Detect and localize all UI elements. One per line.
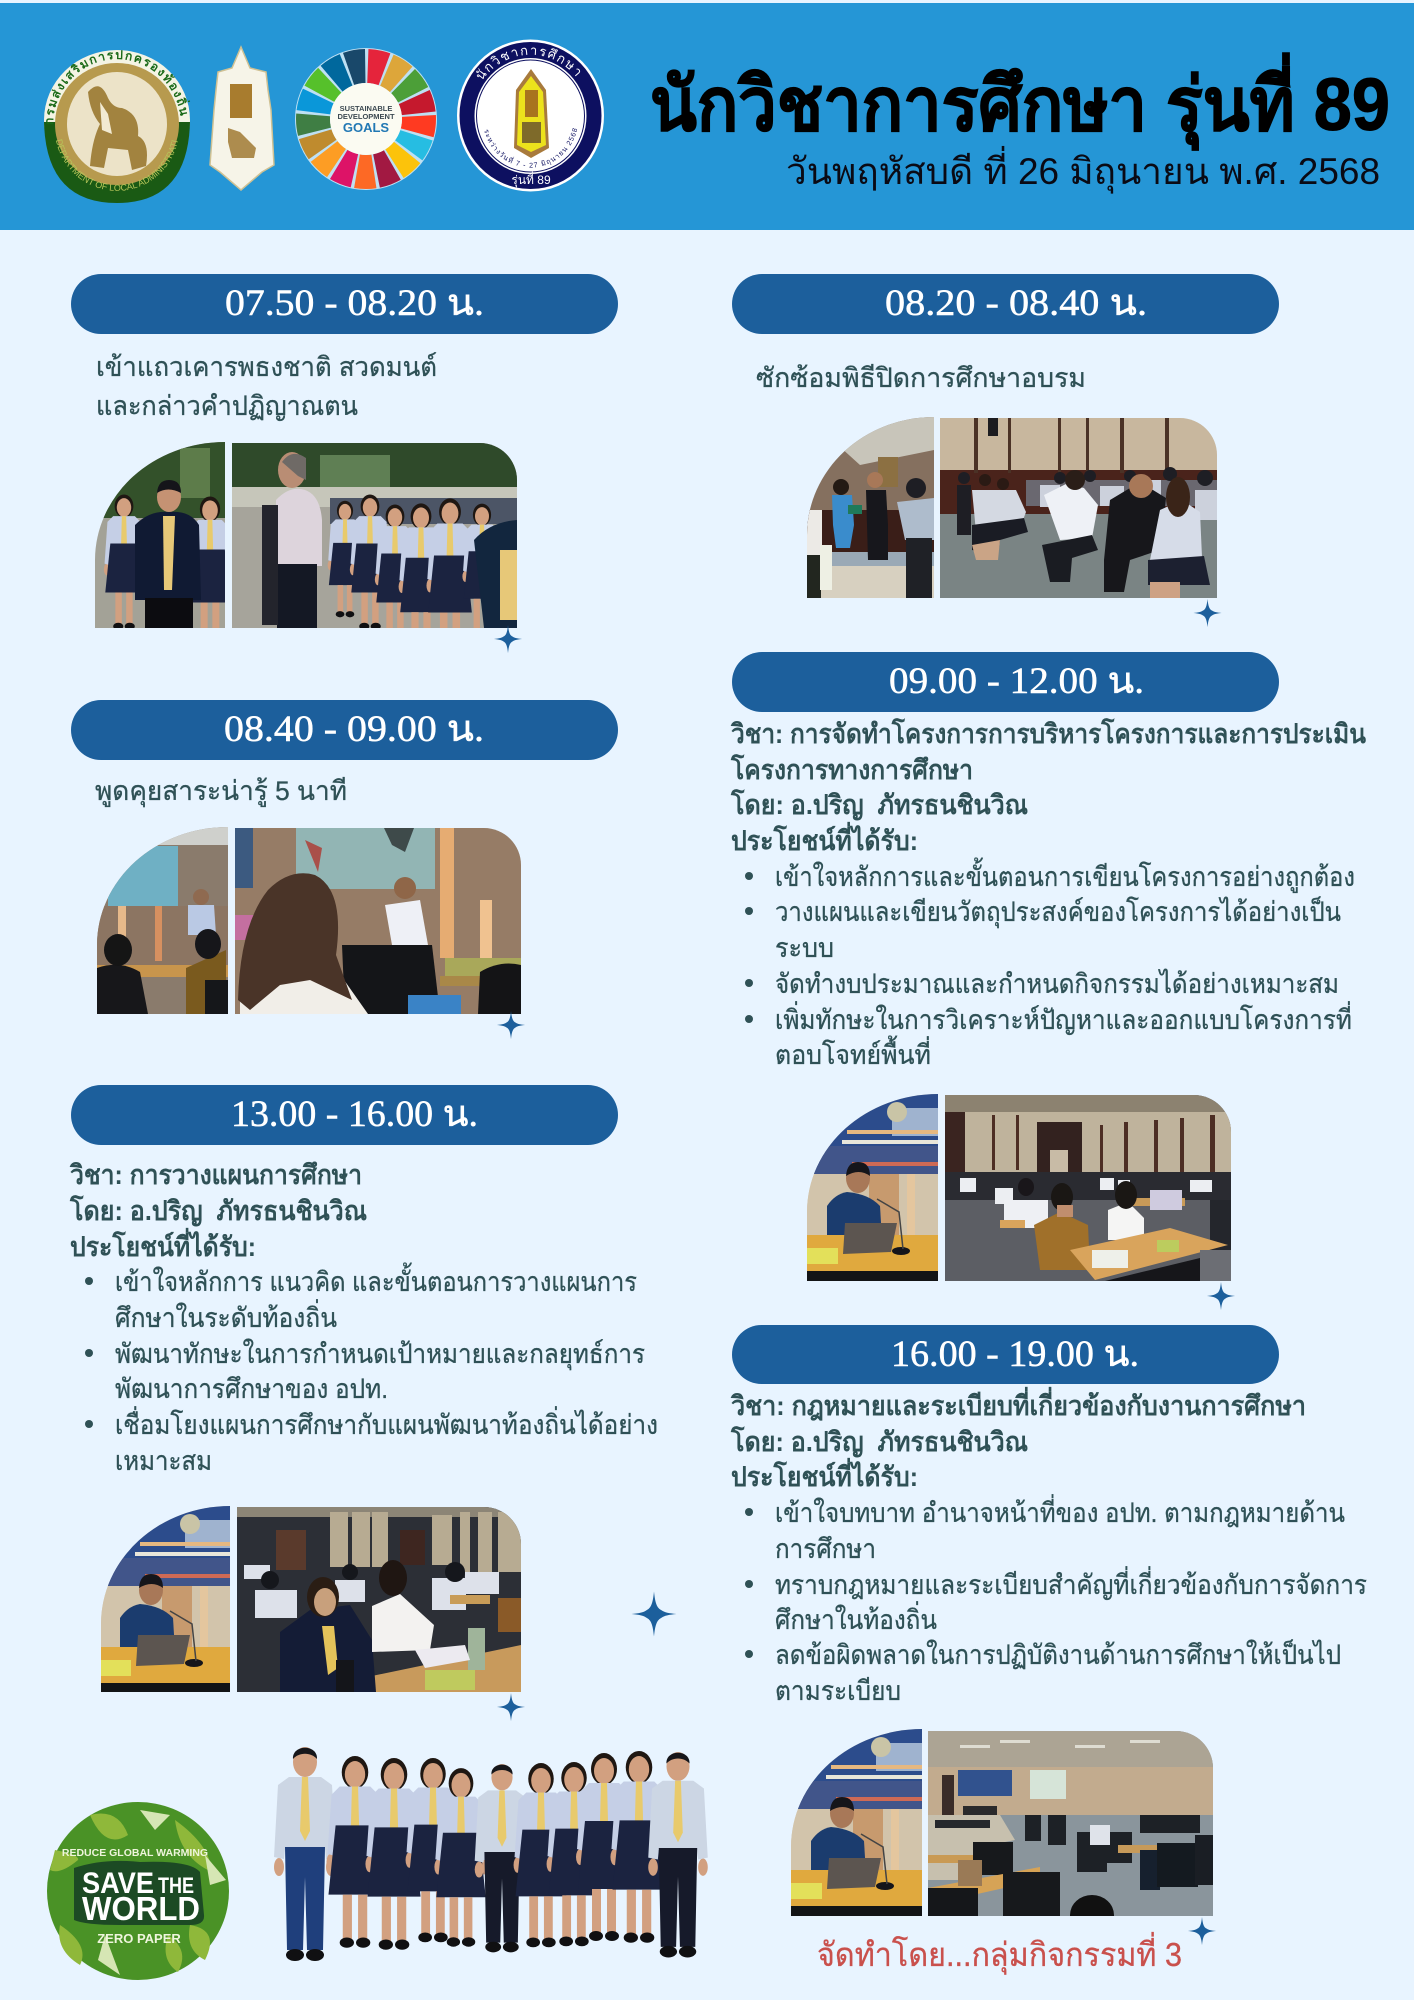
benefits list: ตอบโจทย์พื้นที่ [775,1035,931,1070]
logo: white shield emblem [210,47,274,190]
badge: save the world zero paper: SAVE [82,1867,154,1900]
photo: lecture and classroom [807,1094,1231,1281]
logo: sustainable development goals wheel: GOALS [343,120,389,135]
logo: cohort 89 badge: รุ่นที่ 89 [511,171,551,188]
large sparkle [632,1592,676,1636]
subtitle date: วันพฤหัสบดี ที่ 26 มิถุนายน พ.ศ. 2568 [786,145,1380,194]
logo: cohort 89 badge [457,40,604,192]
time pill: 08.40 - 09.00 น. [224,709,484,750]
badge: save the world zero paper: THE [158,1873,194,1898]
panel: 07.50-08.20 [71,274,618,656]
course details: วิชา: การจัดทำโครงการการบริหารโครงการและการประเมิน [730,717,1366,749]
course details: โครงการทางการศึกษา [730,753,973,785]
badge: save the world zero paper: ZERO PAPER [97,1931,181,1946]
sparkle [1188,1917,1216,1945]
sparkle [497,1011,525,1039]
badge: save the world zero paper [47,1802,229,1980]
benefits list: ระบบ [775,933,834,963]
panel: 08.20-08.40 [732,274,1279,627]
course details: โดย: อ.ปริญ ภัทรธนชินวิณ [69,1194,367,1227]
time pill: 09.00 - 12.00 น. [889,661,1144,702]
benefits list [745,1494,1367,1706]
benefits list [745,857,1355,1070]
course details: ประโยชน์ที่ได้รับ: [731,821,918,856]
benefits list: ศึกษาในระดับท้องถิ่น [115,1299,337,1333]
benefits list: เข้าใจหลักการ แนวคิด และขั้นตอนการวางแผนการ [115,1262,637,1297]
description: และกล่าวคำปฏิญาณตน [96,391,358,421]
logo: department of local administration [44,50,190,203]
sparkle [497,1693,525,1721]
logo: sustainable development goals wheel: DEVELOPMENT [337,112,395,121]
description [96,351,437,421]
course details [730,1386,1306,1492]
logo: sustainable development goals wheel: SUSTAINABLE [340,104,392,113]
course details [69,1160,367,1262]
time pill: 08.20 - 08.40 น. [885,283,1147,324]
benefits list: วางแผนและเขียนวัตถุประสงค์ของโครงการได้อย่างเป็น [775,894,1341,929]
course details: วิชา: การวางแผนการศึกษา [69,1160,362,1190]
description: ซักซ้อมพิธีปิดการศึกษาอบรม [756,363,1086,393]
badge: save the world zero paper: REDUCE GLOBAL WARMING [62,1847,208,1859]
panel: 13.00-16.00 educational planning [69,1085,658,1721]
panel: 08.40-09.00 [71,700,618,1039]
logo: sustainable development goals wheel [289,42,443,196]
credit: prepared by activity group 3: จัดทำโดย...กลุ่มกิจกรรมที่ 3 [817,1932,1182,1975]
logo: cohort 89 badge: ระหว่างวันที่ 7 - 27 มิถุนายน 2568 [484,128,577,168]
time pill: 07.50 - 08.20 น. [225,283,484,324]
header band [0,3,1414,230]
benefits list: ศึกษาในท้องถิ่น [775,1601,937,1635]
benefits list: เหมาะสม [115,1446,212,1476]
description: พูดคุยสาระน่ารู้ 5 นาที [95,776,347,808]
course details [730,717,1366,856]
benefits list: เพิ่มทักษะในการวิเคราะห์ปัญหาและออกแบบโครงการที่ [775,1001,1352,1035]
time pill [732,652,1279,712]
course details: วิชา: กฎหมายและระเบียบที่เกี่ยวข้องกับงานการศึกษา [730,1386,1306,1421]
time pill [71,700,618,760]
time pill [71,1085,618,1145]
course details: ประโยชน์ที่ได้รับ: [70,1227,256,1262]
description: เข้าแถวเคารพธงชาติ สวดมนต์ [96,351,437,382]
time pill [732,274,1279,334]
time pill: 13.00 - 16.00 น. [231,1094,478,1135]
panel: 09.00-12.00 project management [730,652,1366,1310]
benefits list: พัฒนาทักษะในการกำหนดเป้าหมายและกลยุทธ์การ [115,1338,645,1371]
course details: โดย: อ.ปริญ ภัทรธนชินวิณ [730,788,1028,821]
benefits list: พัฒนาการศึกษาของ อปท. [115,1374,388,1404]
photo: 5-minute talk [97,827,521,1014]
time pill: 16.00 - 19.00 น. [891,1334,1139,1375]
benefits list: ทราบกฎหมายและระเบียบสำคัญที่เกี่ยวข้องกับการจัดการ [775,1566,1367,1600]
sparkle [494,625,522,653]
benefits list: เชื่อมโยงแผนการศึกษากับแผนพัฒนาท้องถิ่นได้อย่าง [115,1406,658,1440]
benefits list [85,1262,658,1476]
panel: 16.00-19.00 education law [730,1325,1367,1975]
course details: ประโยชน์ที่ได้รับ: [731,1457,918,1492]
benefits list: การศึกษา [775,1534,876,1564]
photo: closing rehearsal [807,417,1217,598]
benefits list: ตามระเบียบ [775,1676,901,1706]
time pill [71,274,618,334]
benefits list: ลดข้อผิดพลาดในการปฏิบัติงานด้านการศึกษาให้เป็นไป [775,1637,1341,1670]
course details: โดย: อ.ปริญ ภัทรธนชินวิณ [730,1425,1028,1458]
group photo of participants [274,1747,708,1961]
sparkle [1193,599,1222,627]
logo: cohort 89 badge: นักวิชาการศึกษา [476,48,580,80]
sparkle [1207,1282,1235,1310]
benefits list: จัดทำงบประมาณและกำหนดกิจกรรมได้อย่างเหมาะสม [775,969,1339,999]
logo: department of local administration: กรมส่งเสริมการปกครองท้องถิ่น [46,50,190,124]
photo: lecture and seminar room [791,1729,1213,1935]
benefits list: เข้าใจบทบาท อำนาจหน้าที่ของ อปท. ตามกฎหมายด้าน [775,1494,1345,1528]
photo: flag ceremony [95,442,517,628]
photo: lecture and participants [100,1506,521,1693]
time pill [732,1325,1279,1384]
badge: save the world zero paper: WORLD [82,1890,200,1927]
